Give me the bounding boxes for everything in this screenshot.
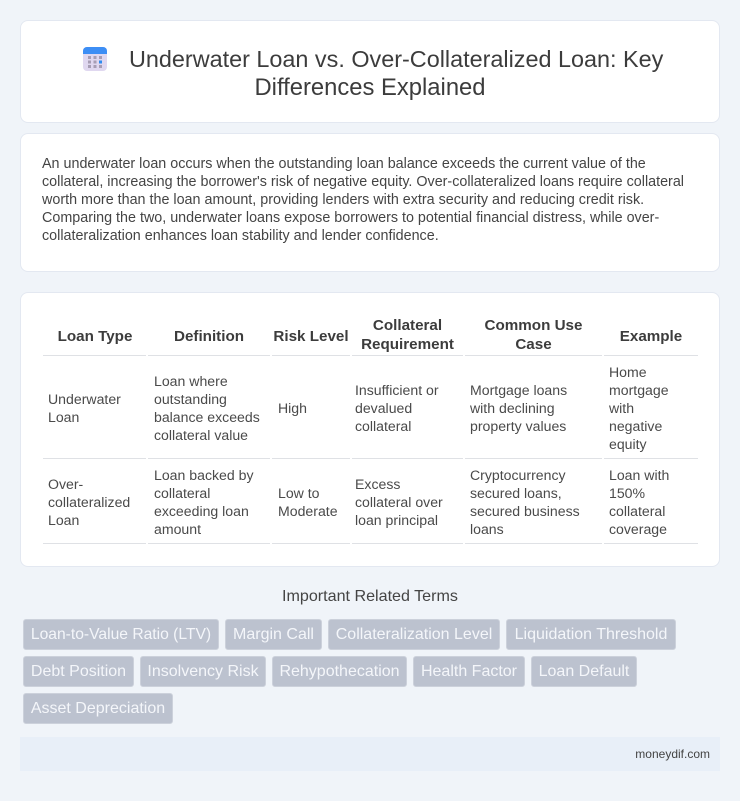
table row: underwater loan: Insufficient or (355, 382, 439, 398)
table row: underwater loan: collateral (355, 418, 411, 434)
table header: Case (515, 336, 552, 353)
table row: over-collateralized loan: Over- (48, 476, 83, 492)
table row: over-collateralized loan: Moderate (278, 503, 338, 519)
table header: Example (620, 328, 682, 345)
related term tags: Health Factor (421, 663, 517, 680)
table header (58, 317, 682, 353)
table row: underwater loan: with (609, 400, 634, 416)
table header: Loan Type (58, 328, 132, 345)
related term tags: Asset Depreciation (31, 700, 165, 717)
table row: underwater loan: with declining (470, 400, 555, 416)
table row: over-collateralized loan: coverage (609, 521, 667, 537)
title: Differences Explained (254, 74, 486, 101)
title card (20, 20, 720, 123)
table row: over-collateralized loan: Low to (278, 485, 320, 501)
table header: Common Use (485, 317, 582, 334)
panel: intro paragraph: collateral, increasing the borrower's risk of negative equity. Over-collateralized loans require collateral (42, 174, 684, 190)
table row: underwater loan: balance exceeds (154, 409, 260, 425)
table row: underwater loan: Loan where (154, 373, 228, 389)
table header: Requirement (361, 336, 454, 353)
table row: underwater loan: High (278, 400, 307, 416)
footer source text: moneydif.com (635, 747, 710, 761)
title: Underwater Loan vs. Over-Collateralized Loan: Key (129, 46, 663, 72)
table row: over-collateralized loan: Loan backed by (154, 467, 254, 483)
related term tags: Liquidation Threshold (515, 626, 667, 643)
related term tags: Loan Default (539, 663, 629, 680)
panel: comparison table (20, 292, 720, 567)
table row: underwater loan: Home (609, 364, 647, 380)
table row: over-collateralized loan: collateral (154, 485, 210, 501)
panel: intro paragraph (20, 133, 720, 272)
table row: underwater loan: negative (609, 418, 662, 434)
table row: underwater loan (48, 364, 669, 452)
related term tags: Rehypothecation (279, 663, 400, 680)
related term tags: Margin Call (233, 626, 314, 643)
table row: underwater loan: Mortgage loans (470, 382, 567, 398)
panel: intro paragraph: worth more than the loan amount, providing lenders with extra security and reducing credit risk. (42, 192, 644, 208)
table row: underwater loan: outstanding (154, 391, 227, 407)
table row: over-collateralized loan: secured loans, (470, 485, 562, 501)
table row: over-collateralized loan: loans (470, 521, 504, 537)
related term tags: Debt Position (31, 663, 126, 680)
table row: underwater loan: Underwater (48, 391, 121, 407)
table row: underwater loan: Loan (48, 409, 79, 425)
table row: over-collateralized loan: Loan with (609, 467, 669, 483)
panel: intro paragraph: collateralization enhances loan stability and lender confidence. (42, 228, 439, 244)
table row: over-collateralized loan (48, 467, 669, 537)
table row: over-collateralized loan: Loan (48, 512, 79, 528)
table row: over-collateralized loan: amount (154, 521, 201, 537)
table row: underwater loan: equity (609, 436, 647, 452)
icon: calendar (83, 47, 107, 71)
table row: over-collateralized loan: collateral (609, 503, 665, 519)
table row: over-collateralized loan: loan principal (355, 512, 438, 528)
related term tags (23, 619, 676, 724)
table header: Definition (174, 328, 244, 345)
table row: over-collateralized loan: exceeding loan (154, 503, 249, 519)
table header: Risk Level (273, 328, 349, 345)
panel: intro paragraph: Comparing the two, underwater loans expose borrowers to potential financial distress, while over- (42, 210, 659, 226)
title (129, 46, 664, 101)
related term tags: Insolvency Risk (147, 663, 259, 680)
related term tags: Collateralization Level (336, 626, 492, 643)
related term tags: Loan-to-Value Ratio (LTV) (31, 626, 211, 643)
table row: over-collateralized loan: 150% (609, 485, 645, 501)
table row: over-collateralized loan: Excess (355, 476, 400, 492)
table row: over-collateralized loan: collateral over (355, 494, 443, 510)
panel: intro paragraph: An underwater loan occurs when the outstanding loan balance exceeds the current value of the (42, 156, 646, 172)
section heading: related terms: Important Related Terms (282, 587, 458, 605)
table row: underwater loan: property values (470, 418, 566, 434)
table row: underwater loan: collateral value (154, 427, 248, 443)
table row: underwater loan: mortgage (609, 382, 669, 398)
table row: underwater loan: devalued (355, 400, 412, 416)
table header: Collateral (373, 317, 442, 334)
table row: over-collateralized loan: Cryptocurrency (470, 467, 566, 483)
table row: over-collateralized loan: collateralized (48, 494, 130, 510)
footer bar (20, 737, 720, 771)
table row: over-collateralized loan: secured business (470, 503, 580, 519)
